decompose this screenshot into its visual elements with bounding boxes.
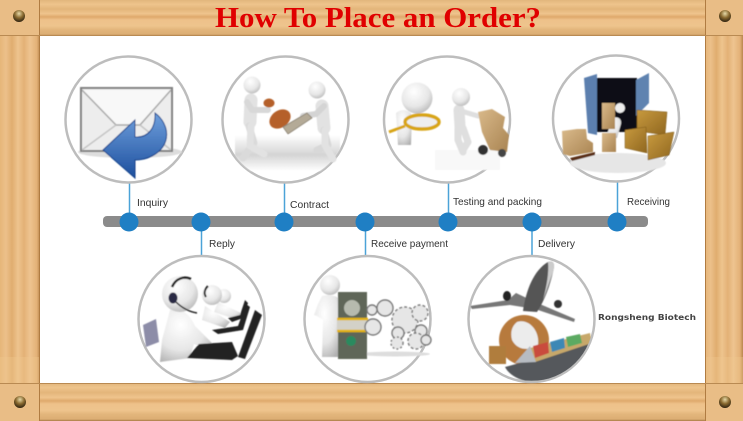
step labels: Contract xyxy=(290,199,329,211)
icon: headset xyxy=(168,278,208,313)
step labels xyxy=(137,196,670,250)
figure: left person xyxy=(243,76,268,158)
step circle: inquiry xyxy=(66,56,192,182)
step labels: Testing and packing xyxy=(453,196,542,208)
icon: laptops xyxy=(187,300,262,360)
icon: boxes on trolley xyxy=(478,109,509,157)
figure: porter xyxy=(452,88,478,152)
figures: call-center row xyxy=(160,276,243,362)
icon: magnifier xyxy=(389,115,439,132)
timeline bar xyxy=(103,216,648,227)
icon: stamp xyxy=(264,98,294,133)
step labels: Receive payment xyxy=(371,238,448,250)
icon: globe xyxy=(499,315,549,365)
step labels: Delivery xyxy=(538,238,576,250)
step labels: Inquiry xyxy=(137,197,169,209)
icon: blue reply arrow xyxy=(103,113,167,178)
figure: person xyxy=(314,275,340,357)
step labels: Reply xyxy=(209,238,236,250)
step circle: contract xyxy=(222,56,348,182)
step labels: Receiving xyxy=(627,196,670,208)
icon: cardboard boxes xyxy=(562,103,616,156)
step circle: receive payment xyxy=(304,256,431,382)
step circle: testing and packing xyxy=(384,56,510,182)
icon: wooden crates xyxy=(625,110,674,160)
title: How To Place an Order? xyxy=(215,3,541,34)
icon: dollar stack xyxy=(337,292,368,359)
icon: server tower xyxy=(143,319,159,347)
icon: envelope xyxy=(78,88,182,158)
step circle: receiving xyxy=(553,56,679,182)
connector lines xyxy=(130,182,618,256)
figure: worker xyxy=(606,117,621,138)
step circle: reply xyxy=(138,256,264,382)
figure: inspector xyxy=(396,82,432,145)
icon: parcels xyxy=(489,346,506,364)
icon: cargo ship xyxy=(505,333,592,381)
figure: right person xyxy=(303,82,333,159)
timeline dots xyxy=(120,212,626,232)
icon: shipping container xyxy=(584,73,649,135)
icon: document xyxy=(283,113,312,134)
icon: airplane xyxy=(470,261,575,322)
icon: gears xyxy=(365,300,431,349)
step circle: delivery xyxy=(468,256,594,382)
brand label: Rongsheng Biotech xyxy=(598,313,696,322)
